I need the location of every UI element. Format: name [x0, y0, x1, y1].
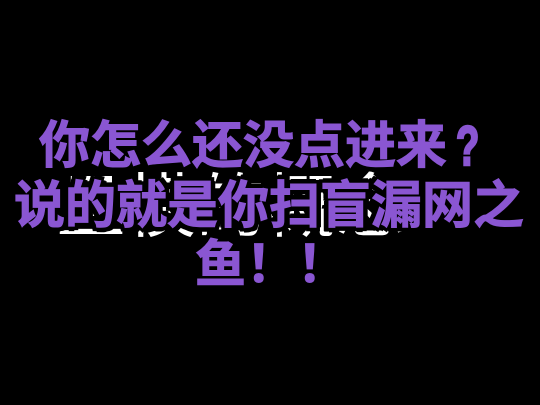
background subtitle text partly hidden: 且模的概念 [56, 168, 406, 246]
headline line 2: 说的就是你扫盲漏网之 [14, 177, 524, 234]
headline line 1: 你怎么还没点进来 [39, 117, 447, 174]
headline line 3: 鱼！！ [195, 236, 348, 293]
question mark: ? [456, 114, 479, 177]
